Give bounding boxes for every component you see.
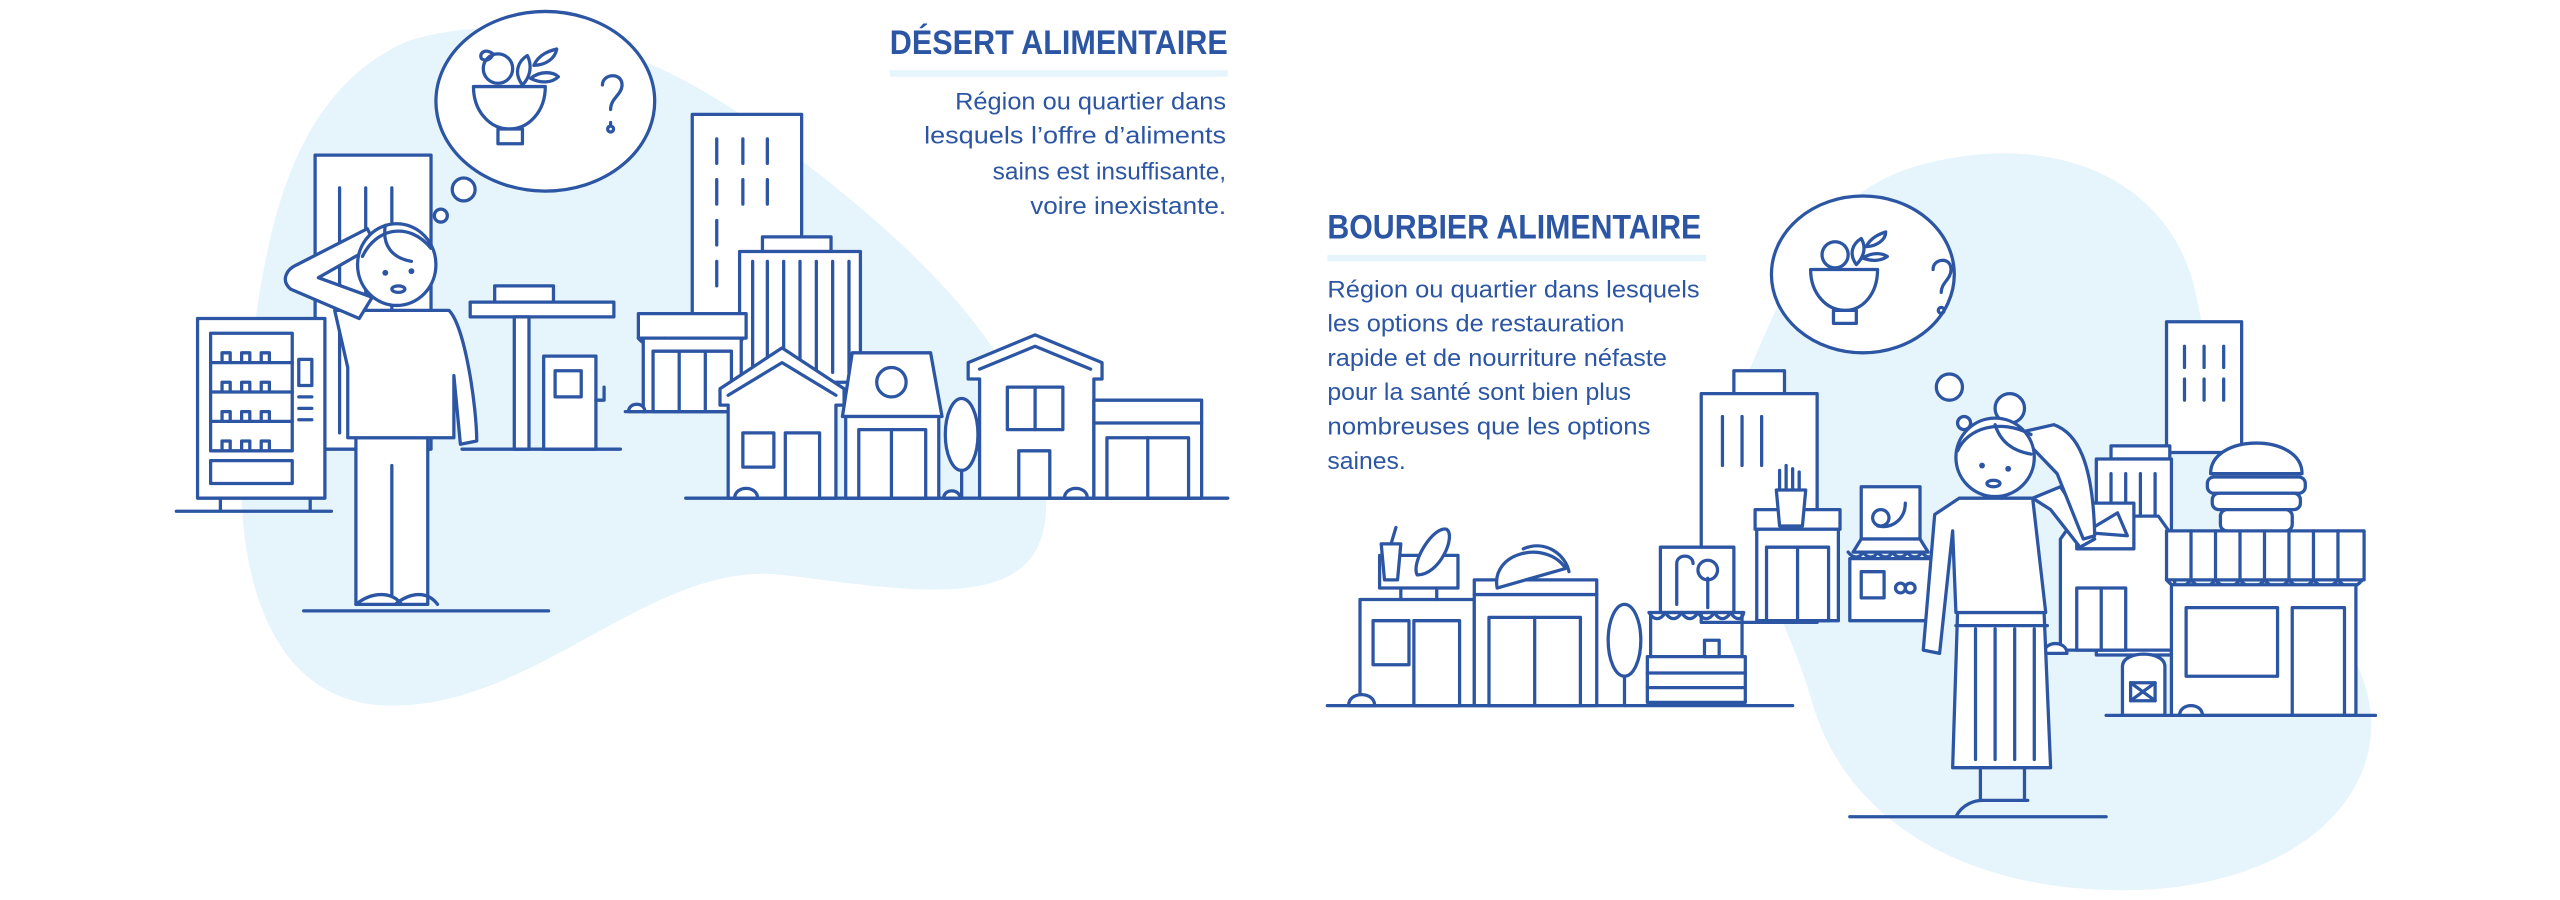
shop with round window: [842, 353, 942, 498]
burger shop: [2167, 443, 2364, 715]
house 2: [968, 335, 1102, 498]
tree: [945, 399, 978, 498]
building: tall behind person: [315, 155, 431, 449]
text block: bourbier definition: les options de restauration: [1327, 311, 1624, 338]
text block: bourbier definition: rapide et de nourriture néfaste: [1327, 345, 1667, 372]
background blob left: [241, 28, 1046, 706]
heading: desert alimentaire: [890, 22, 1228, 77]
pizza shop & mid building: [2060, 446, 2175, 655]
text block: bourbier definition: pour la santé sont bien plus: [1327, 379, 1631, 406]
thought bubble: healthy food: [434, 11, 655, 222]
scene: bourbier alimentaire: [1327, 196, 2376, 817]
heading: bourbier alimentaire: BOURBIER ALIMENTAIRE: [1327, 208, 1701, 246]
text block: bourbier definition: nombreuses que les options: [1327, 413, 1651, 440]
heading: bourbier alimentaire: [1327, 208, 1706, 261]
gas station: [462, 286, 620, 449]
tree right scene: [1608, 604, 1641, 706]
heading: desert alimentaire: DÉSERT ALIMENTAIRE: [890, 22, 1228, 62]
fries shop: [1755, 466, 1840, 621]
shop with awning: [625, 314, 746, 412]
buildings: city right: [625, 114, 1228, 498]
person: scratching head: [285, 224, 549, 611]
text block: desert definition: Région ou quartier dans: [955, 88, 1226, 115]
text block: desert definition: lesquels l’offre d’aliments: [924, 123, 1226, 150]
text block: bourbier definition: Région ou quartier dans lesquels: [1327, 276, 1700, 303]
mailbox: [2122, 654, 2165, 715]
low building: [1094, 400, 1202, 498]
thought bubble: healthy food right: [1771, 196, 1971, 430]
text block: bourbier definition: saines.: [1327, 448, 1406, 475]
fruit shop: [1848, 487, 1936, 621]
text block: desert definition: voire inexistante.: [1030, 193, 1226, 220]
background blob right: [1732, 153, 2371, 890]
scene: desert alimentaire: [176, 11, 1228, 611]
text block: desert definition: [924, 88, 1226, 220]
text block: bourbier definition: [1327, 276, 1700, 475]
house 1: [720, 348, 844, 498]
text block: desert definition: sains est insuffisante,: [993, 159, 1226, 186]
candy kiosk: [1647, 547, 1745, 702]
vending machine: [176, 319, 331, 511]
left shops: [1360, 528, 1597, 706]
person: woman scratching head: [1850, 394, 2106, 817]
tall buildings back: [1701, 322, 2242, 622]
